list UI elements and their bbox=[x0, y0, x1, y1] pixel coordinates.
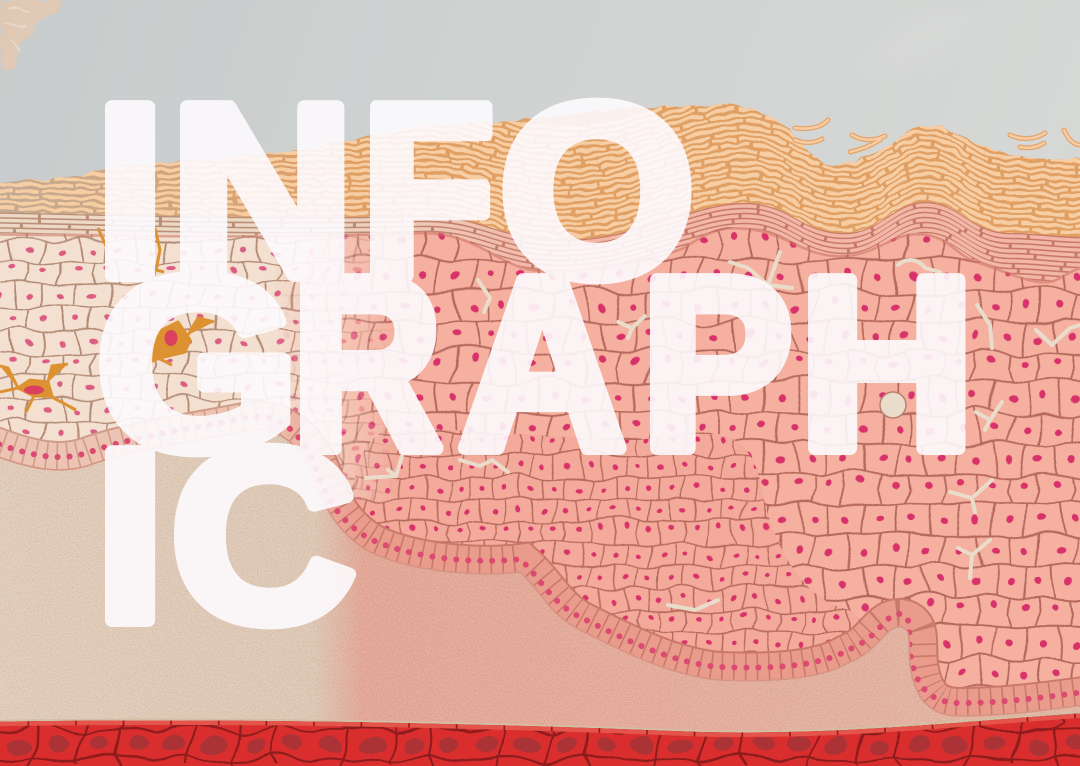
corner cell fragment top left bbox=[0, 0, 62, 70]
melanocyte cell: left bbox=[0, 364, 76, 412]
title line: IC: I bbox=[96, 400, 165, 672]
title line: INFO: F bbox=[362, 54, 494, 327]
title line: INFO: O bbox=[499, 55, 695, 327]
loose flakes above the corneum bbox=[795, 120, 1080, 152]
dermis layer bbox=[0, 430, 1080, 740]
title line: IC: C bbox=[171, 401, 356, 673]
beige cells on the left bbox=[0, 233, 391, 503]
title line: GRAPH: R bbox=[292, 227, 442, 500]
melanocyte cell: centre bbox=[148, 318, 214, 372]
title line: GRAPH: A bbox=[459, 229, 626, 500]
melanocyte cell: upper bbox=[98, 228, 164, 272]
title line: INFO bbox=[96, 54, 695, 327]
faint light streak top right bbox=[850, 14, 975, 72]
title line: INFO: I bbox=[96, 55, 165, 327]
title line: GRAPH: G bbox=[96, 227, 299, 500]
basal cell layer bbox=[0, 416, 1080, 716]
title: INFOGRAPHIC bbox=[96, 54, 975, 673]
capillary top edge bbox=[0, 711, 1080, 731]
dark band under granular layer bbox=[0, 227, 1080, 281]
title line: INFO: N bbox=[170, 54, 354, 327]
cream vacuole circle bbox=[880, 392, 906, 418]
epidermis cell field bbox=[0, 227, 1080, 716]
title line: GRAPH bbox=[96, 227, 975, 500]
stratum corneum: orange flakes bbox=[0, 103, 1080, 240]
title line: GRAPH: P bbox=[641, 227, 793, 500]
cream intercellular cracks bbox=[366, 252, 1080, 610]
pink large cells bbox=[0, 227, 1080, 687]
pink small cells bbox=[354, 429, 860, 652]
capillary layer bbox=[0, 713, 1080, 766]
basal outer edge bbox=[0, 429, 1080, 716]
granular layer bbox=[0, 202, 1080, 281]
title line: GRAPH: H bbox=[799, 227, 975, 500]
